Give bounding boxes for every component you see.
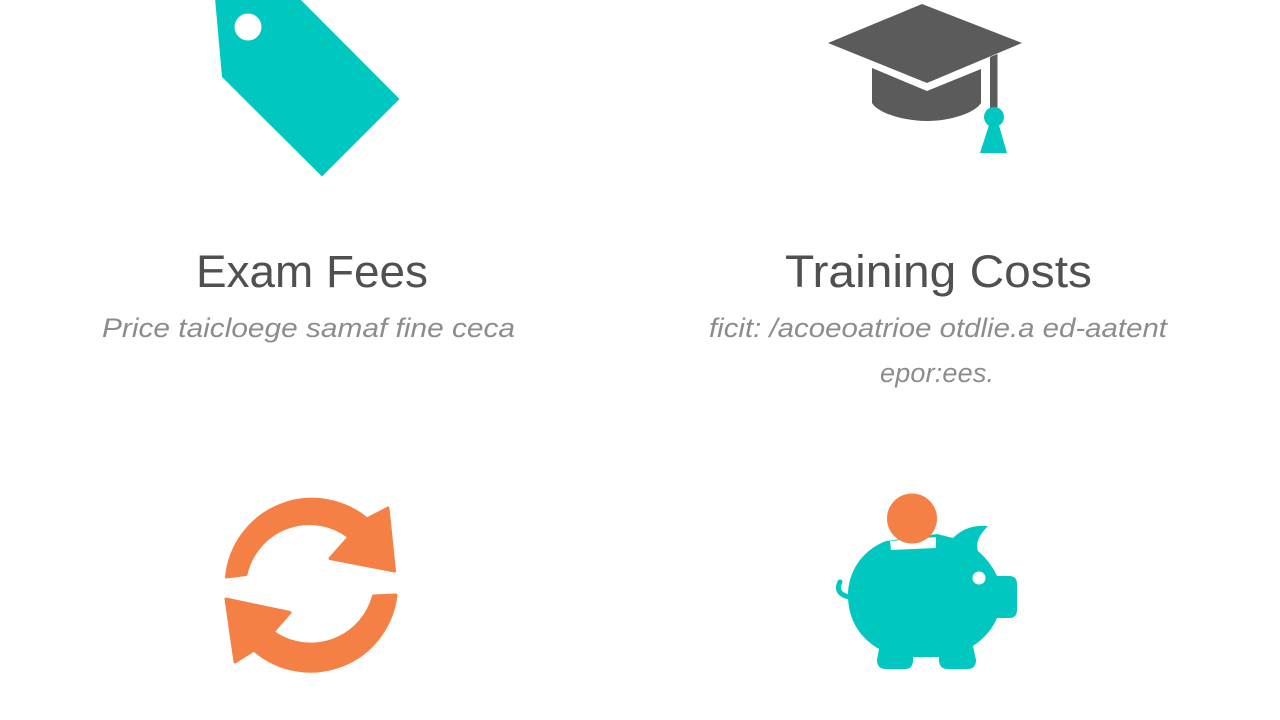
coin <box>887 494 937 544</box>
text: training costs description second line: epor:ees. <box>880 358 994 388</box>
piggy bank tail <box>838 582 849 597</box>
icon: renewal arrows <box>226 499 396 671</box>
text: exam fees description: Price taicloege samaf fine ceca <box>102 313 515 343</box>
panel: exam fees <box>102 0 515 343</box>
heading: exam fees: Exam Fees <box>196 246 428 297</box>
piggy bank eye <box>972 572 986 584</box>
heading: training costs: Training Costs <box>785 246 1092 297</box>
text: training costs description: ficit: /acoeoatrioe otdlie.a ed-aatent <box>709 313 1169 343</box>
coin slot <box>890 537 936 550</box>
icon: graduation cap <box>828 4 1022 153</box>
piggy bank body <box>848 526 1017 669</box>
panel: training costs <box>709 4 1169 388</box>
icon: price tag <box>215 0 400 176</box>
icon: piggy bank <box>838 494 1017 669</box>
